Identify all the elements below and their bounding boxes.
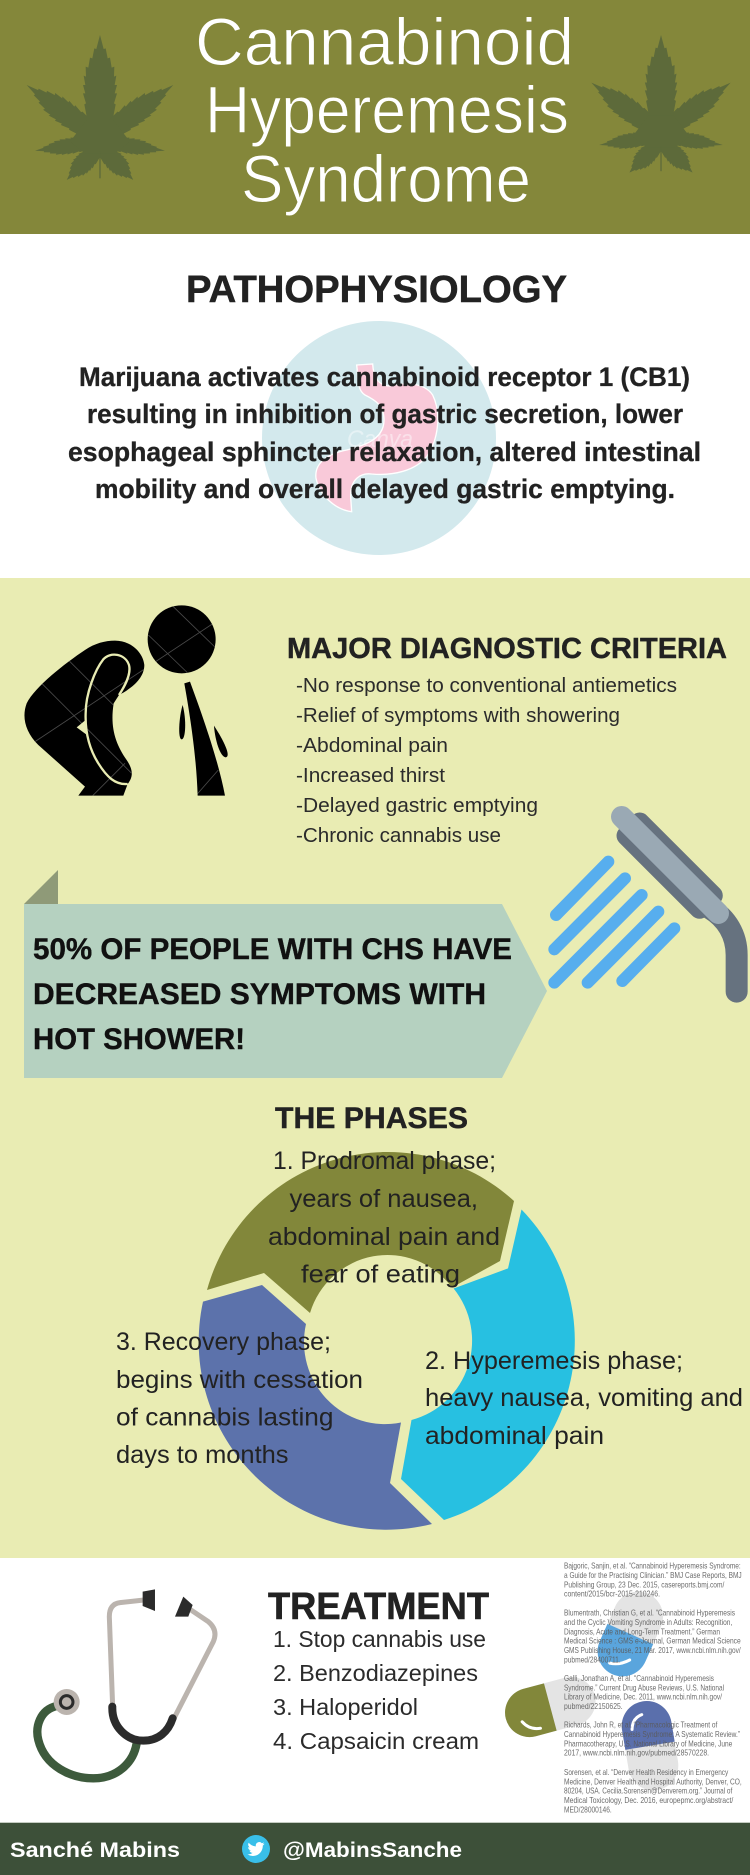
heading: treatment: TREATMENT — [268, 1586, 489, 1628]
icon: stomach in circle — [262, 321, 496, 555]
panel: header banner — [0, 0, 750, 234]
text block: phase 2 — [425, 1347, 743, 1450]
heading: major diagnostic criteria: MAJOR DIAGNOSTIC CRITERIA — [287, 633, 727, 665]
text block: phase 3: days to months — [116, 1441, 288, 1469]
text block: references: pubmed/22150625. — [564, 1702, 623, 1711]
icon: cannabis leaf left — [19, 35, 180, 187]
icon: twitter — [242, 1835, 270, 1863]
text block: phase 3: begins with cessation — [116, 1366, 363, 1394]
icon: pill left — [500, 1671, 601, 1743]
text block: treatment list: 4. Capsaicin cream — [273, 1728, 479, 1754]
text block: diagnostic criteria list: -Abdominal pain — [296, 735, 448, 757]
author name: Sanché Mabins — [10, 1839, 180, 1862]
text block: diagnostic criteria list — [296, 675, 677, 847]
icon: cannabis leaf right — [585, 35, 738, 180]
text block: phase 1: years of nausea, — [290, 1185, 478, 1213]
twitter handle: @MabinsSanche — [283, 1839, 462, 1862]
heading: pathophysiology: PATHOPHYSIOLOGY — [186, 269, 567, 311]
icon: person vomiting — [24, 605, 232, 797]
title: Cannabinoid — [195, 5, 574, 80]
callout: hot shower ribbon — [24, 870, 547, 1078]
text block: pathophysiology description: esophageal sphincter relaxation, altered intestinal — [68, 437, 701, 467]
text block: pathophysiology description: mobility and overall delayed gastric emptying. — [95, 474, 675, 504]
text block: references: pubmed/28400711. — [564, 1655, 621, 1664]
panel: footer — [0, 1822, 750, 1875]
text block: phase 1: fear of eating — [301, 1260, 460, 1288]
text block: diagnostic criteria list: -No response to conventional antiemetics — [296, 675, 677, 697]
text block: phase 1: 1. Prodromal phase; — [273, 1147, 496, 1175]
chart: phases donut — [199, 1152, 575, 1530]
text block: treatment list: 3. Haloperidol — [273, 1694, 418, 1720]
text block: pathophysiology description: resulting in inhibition of gastric secretion, lower — [87, 399, 683, 429]
text block: references: 2017, www.ncbi.nlm.nih.gov/pubmed/28570228. — [564, 1749, 709, 1758]
icon: pill top — [590, 1584, 671, 1684]
segment: recovery — [199, 1285, 432, 1530]
title — [195, 5, 574, 217]
text block: pathophysiology description — [68, 362, 701, 504]
text block: references: content/2015/bcr-2015-210246. — [564, 1590, 660, 1598]
callout: hot shower ribbon: DECREASED SYMPTOMS WITH — [33, 978, 486, 1011]
callout: hot shower ribbon: HOT SHOWER! — [33, 1023, 245, 1056]
text block: phase 2: 2. Hyperemesis phase; — [425, 1347, 683, 1375]
title: Syndrome — [241, 142, 531, 217]
icon: pill bottom — [618, 1697, 682, 1794]
segment: prodromal — [207, 1152, 514, 1313]
text block: pathophysiology description: Marijuana activates cannabinoid receptor 1 (CB1) — [79, 362, 690, 392]
title: Hyperemesis — [205, 73, 569, 148]
panel: pathophysiology — [0, 234, 750, 578]
panel: treatment background — [0, 1558, 750, 1823]
heading: the phases: THE PHASES — [275, 1102, 468, 1135]
text block: treatment list: 2. Benzodiazepines — [273, 1660, 478, 1686]
text block: phase 1 — [268, 1147, 500, 1288]
text block: phase 3: 3. Recovery phase; — [116, 1328, 331, 1356]
text block: phase 2: abdominal pain — [425, 1422, 604, 1450]
text block: phase 3 — [116, 1328, 363, 1469]
icon: stethoscope — [37, 1589, 215, 1778]
text block: diagnostic criteria list: -Delayed gastric emptying — [296, 795, 538, 817]
text block: treatment list — [273, 1626, 486, 1754]
icon: stomach in circle: Canva — [347, 426, 413, 453]
text block: references: Galli, Jonathan A, et al. “Cannabinoid Hyperemesis — [564, 1674, 714, 1683]
text block: references: MED/28000146. — [564, 1805, 612, 1814]
text block: references — [564, 1562, 742, 1814]
text block: diagnostic criteria list: -Relief of symptoms with showering — [296, 705, 620, 727]
text block: phase 2: heavy nausea, vomiting and — [425, 1384, 743, 1412]
text block: diagnostic criteria list: -Chronic cannabis use — [296, 825, 501, 847]
segment: hyperemesis — [401, 1210, 575, 1520]
panel: diagnostic and phases background — [0, 578, 750, 1558]
icon: shower head — [554, 808, 737, 992]
text block: phase 1: abdominal pain and — [268, 1223, 500, 1251]
text block: treatment list: 1. Stop cannabis use — [273, 1626, 486, 1652]
text block: phase 3: of cannabis lasting — [116, 1404, 334, 1432]
text block: diagnostic criteria list: -Increased thirst — [296, 765, 445, 787]
callout: hot shower ribbon: 50% OF PEOPLE WITH CHS HAVE — [33, 933, 512, 966]
